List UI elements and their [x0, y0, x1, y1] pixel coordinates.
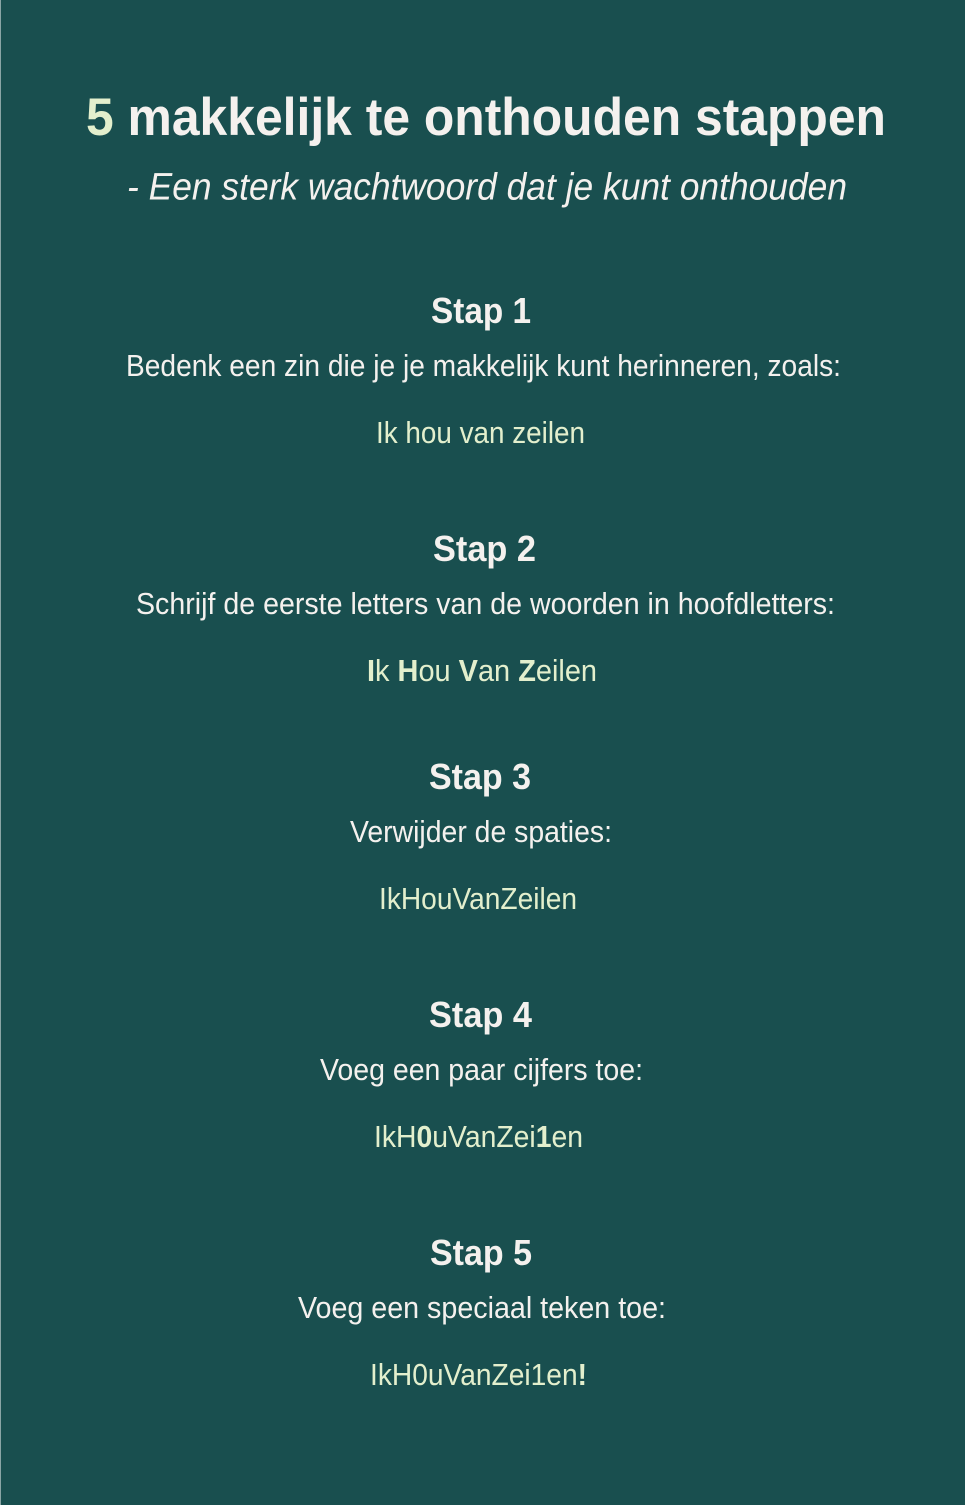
step 3: [350, 756, 612, 916]
step 4: [320, 994, 643, 1154]
step 1 example: Ik hou van zeilen: [376, 415, 585, 450]
step 1: [126, 290, 841, 450]
step 5 example: IkH0uVanZei1en!: [370, 1357, 587, 1392]
step 5 heading: Stap 5: [430, 1232, 532, 1273]
step 4 heading: Stap 4: [429, 994, 532, 1035]
step 3 heading: Stap 3: [429, 756, 531, 797]
title: 5 makkelijk te onthouden stappen: [86, 88, 886, 147]
step 2 heading: Stap 2: [433, 528, 536, 569]
step 5: [298, 1232, 666, 1392]
step 2 example: Ik Hou Van Zeilen: [367, 653, 597, 688]
step 2: [136, 528, 835, 688]
step 4 example: IkH0uVanZei1en: [374, 1119, 583, 1154]
step 5 instruction: Voeg een speciaal teken toe:: [298, 1290, 666, 1325]
step 2 instruction: Schrijf de eerste letters van de woorden in hoofdletters:: [136, 586, 835, 621]
step 3 example: IkHouVanZeilen: [379, 881, 577, 916]
step 4 instruction: Voeg een paar cijfers toe:: [320, 1052, 643, 1087]
step 1 heading: Stap 1: [431, 290, 531, 331]
step 3 instruction: Verwijder de spaties:: [350, 814, 612, 849]
step 1 instruction: Bedenk een zin die je je makkelijk kunt herinneren, zoals:: [126, 348, 841, 383]
subtitle: - Een sterk wachtwoord dat je kunt onthouden: [127, 166, 847, 208]
